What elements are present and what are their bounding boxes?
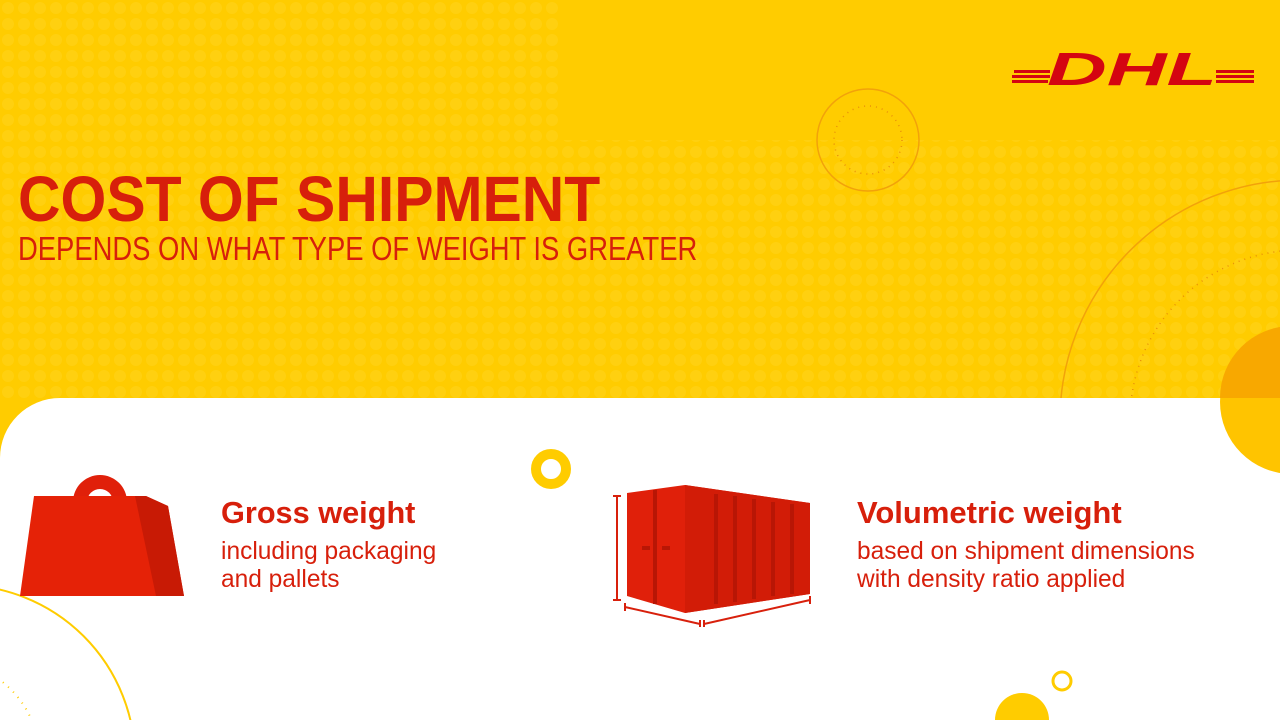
text: gross weight: including packaging	[221, 537, 436, 565]
text: volumetric weight: based on shipment dimensions	[857, 537, 1195, 565]
icon: weight	[20, 475, 184, 596]
DHL logo	[1012, 50, 1254, 90]
white panel	[0, 398, 1280, 720]
text: gross weight: Gross weight	[221, 495, 415, 530]
title: COST OF SHIPMENT	[18, 163, 600, 235]
icon: container	[613, 485, 811, 627]
text: gross weight: and pallets	[221, 565, 340, 593]
subtitle: DEPENDS ON WHAT TYPE OF WEIGHT IS GREATER	[18, 230, 697, 267]
text: volumetric weight: with density ratio applied	[857, 565, 1125, 593]
text: gross weight	[221, 495, 436, 593]
text: volumetric weight: Volumetric weight	[857, 495, 1122, 530]
text: volumetric weight	[857, 495, 1195, 593]
